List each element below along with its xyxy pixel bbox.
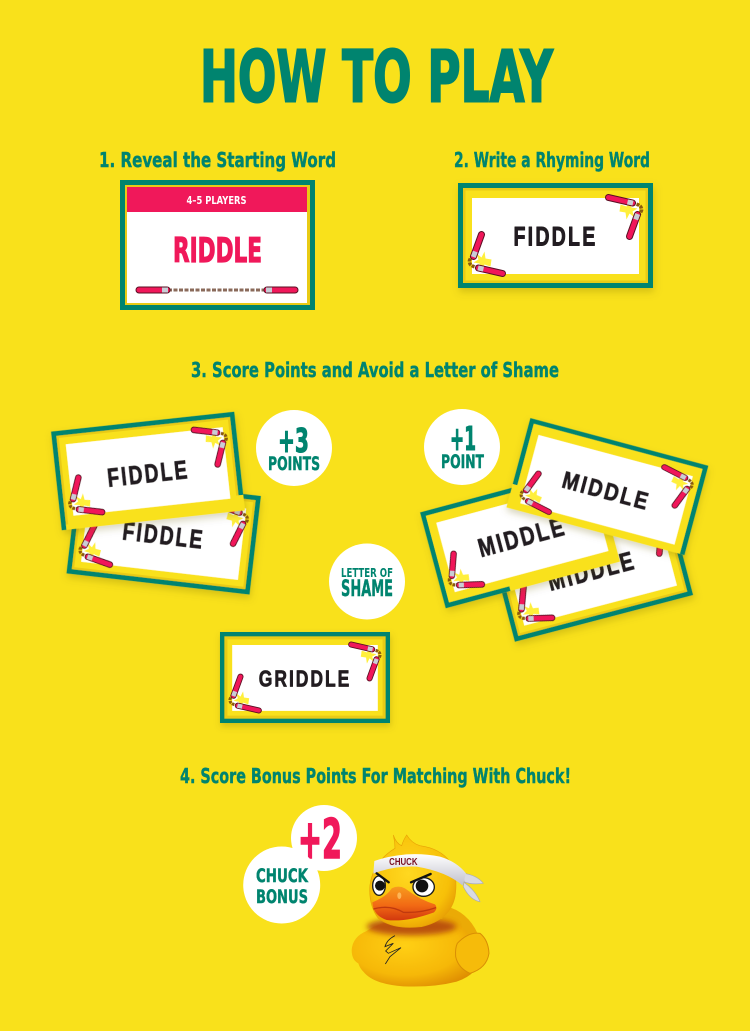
card: fiddle (front)	[51, 412, 245, 530]
card: fiddle (back)	[66, 475, 261, 595]
headband label: CHUCK	[389, 857, 418, 868]
card: middle (left): MIDDLE	[475, 513, 569, 563]
badge: chuck bonus	[243, 846, 320, 924]
heading: step 1: 1. Reveal the Starting Word	[99, 148, 336, 172]
beak	[372, 887, 436, 920]
heading: step 3: 3. Score Points and Avoid a Letter of Shame	[191, 358, 559, 382]
card: middle (back): MIDDLE	[545, 547, 639, 597]
card: middle (front)	[506, 418, 708, 555]
card: griddle: GRIDDLE	[259, 666, 351, 692]
badge: letter of shame	[329, 544, 405, 620]
badge: +2	[291, 805, 357, 871]
card header: players	[127, 187, 307, 212]
heading: step 4: 4. Score Bonus Points For Matching With Chuck!	[180, 764, 571, 788]
badge: +1 point: +1	[450, 419, 476, 458]
card: middle (front): MIDDLE	[559, 467, 653, 516]
badge: chuck bonus: BONUS	[256, 886, 308, 908]
icon: chuck the rubber duck	[352, 835, 489, 987]
badge: +1 point	[424, 409, 500, 485]
badge: chuck bonus: CHUCK	[256, 865, 309, 887]
card: fiddle written word: FIDDLE	[514, 222, 598, 252]
title: HOW TO PLAY	[200, 36, 554, 118]
headband	[463, 873, 483, 902]
card: griddle	[220, 632, 390, 723]
icon: straight nunchucks	[139, 288, 295, 292]
card: middle (left)	[420, 466, 620, 608]
badge: letter of shame: LETTER OF	[341, 565, 393, 580]
chest mark	[385, 936, 401, 964]
badge: letter of shame: SHAME	[341, 577, 393, 602]
left eye	[373, 876, 385, 895]
card: riddle starting word	[120, 180, 315, 310]
card: fiddle (back): FIDDLE	[121, 518, 206, 555]
badge: +1 point: POINT	[441, 452, 484, 473]
starting word: RIDDLE	[173, 231, 262, 271]
badge: +3 points	[256, 410, 332, 486]
players label: 4–5 PLAYERS	[186, 195, 246, 207]
wing	[456, 933, 489, 973]
heading: step 2: 2. Write a Rhyming Word	[454, 148, 650, 172]
card: fiddle (front): FIDDLE	[106, 456, 191, 493]
right eye	[413, 878, 434, 896]
badge: +3 points: +3	[278, 421, 309, 460]
card: fiddle written word	[458, 183, 653, 288]
badge: +3 points: POINTS	[268, 454, 320, 475]
badge: +2: +2	[298, 808, 342, 871]
card: middle (back)	[490, 499, 693, 642]
